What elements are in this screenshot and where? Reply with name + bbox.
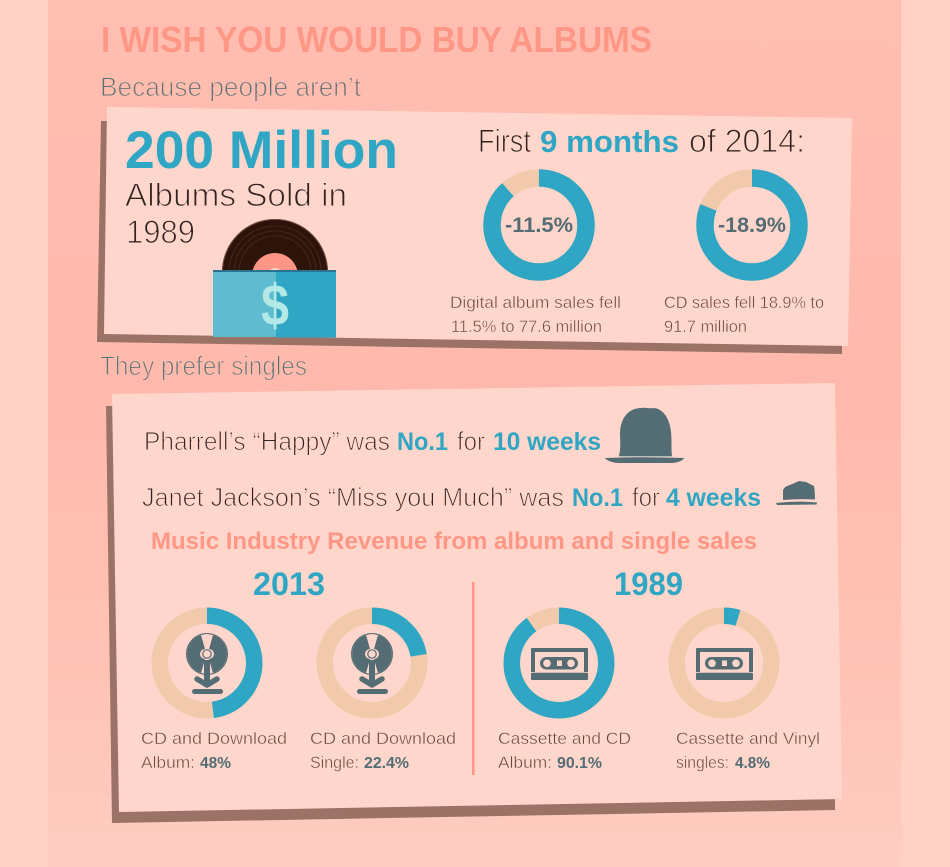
icon: cassette [696,648,753,680]
icon: big hat [605,408,684,463]
line: janet: for [632,482,660,512]
caption: cd album: 48% [200,755,231,772]
caption: digital album [450,293,621,336]
heading: first 9 months of 2014: First [478,123,531,159]
caption: cassette album: 90.1% [557,755,602,772]
line: janet: Janet Jackson’s “Miss you Much” was [142,482,564,512]
caption: cd: CD sales fell 18.9% to [664,293,824,312]
line: janet: 4 weeks [666,484,761,512]
caption: cd album: Album: [141,753,195,772]
divider [472,582,474,775]
panel: singles [106,383,842,823]
subtitle: they prefer singles: They prefer singles [100,351,307,381]
caption: cd [664,293,824,336]
line: janet: No.1 [572,484,623,512]
caption: cd single: Single: [310,753,359,772]
big number: 200 Million [125,121,398,180]
caption: cassette singles: 4.8% [735,755,770,772]
line: pharrell: 10 weeks [493,428,601,456]
icon: cassette [531,648,588,680]
caption: cassette album: Album: [498,753,552,772]
donut: cd single 22.4 [325,616,419,710]
caption: cd album [141,729,287,772]
caption: cassette singles [676,729,820,772]
caption: cd single [310,729,456,772]
donut: cassette vinyl 4.8 [677,616,771,710]
panel shadow [106,406,835,823]
caption: cassette singles: singles: [676,753,729,772]
caption: cd single: 22.4% [364,755,409,772]
caption: digital album: Digital album sales fell [450,293,621,312]
line: pharrell: for [457,426,485,456]
caption: cassette album [498,729,631,772]
caption: cd album: CD and Download [141,729,287,748]
year 2013: 2013 [253,566,325,602]
donut: cd: -18.9% [718,214,786,237]
panel background [104,107,852,346]
year 1989: 1989 [614,566,683,602]
panel: album sales [97,107,852,354]
donut: cd [705,178,799,272]
title: I WISH YOU WOULD BUY ALBUMS [101,19,652,60]
caption: cassette singles: Cassette and Vinyl [676,729,820,748]
caption: cd: 91.7 million [664,317,747,336]
caption: cd single: CD and Download [310,729,456,748]
heading: first 9 months of 2014: of 2014: [689,123,805,159]
icon: vinyl record in sleeve [213,219,336,338]
heading: first 9 months of 2014: 9 months [540,124,679,159]
donut: digital album [492,178,586,272]
panel shadow [97,121,842,354]
caption: digital album: 11.5% to 77.6 million [451,317,602,336]
icon: cd download [186,634,228,694]
line: pharrell [144,426,601,456]
donut: cd album 48 [160,616,254,710]
icon: small hat [776,481,817,505]
subtitle: because people aren't: Because people aren’t [100,72,361,102]
panel background [112,383,842,812]
heading: revenue: Music Industry Revenue from album and single sales [151,528,757,555]
icon: vinyl record in sleeve: $ [261,273,289,338]
albums sold text [125,177,347,250]
donut: digital album: -11.5% [505,214,573,237]
albums sold text: 1989 [126,214,195,250]
icon: cd download [352,634,392,694]
donut: cassette album 90.1 [512,616,606,710]
albums sold text: Albums Sold in [125,177,347,213]
heading: first 9 months of 2014 [478,123,805,159]
caption: cassette album: Cassette and CD [498,729,631,748]
line: pharrell: Pharrell’s “Happy” was [144,426,390,456]
line: pharrell: No.1 [397,428,448,456]
